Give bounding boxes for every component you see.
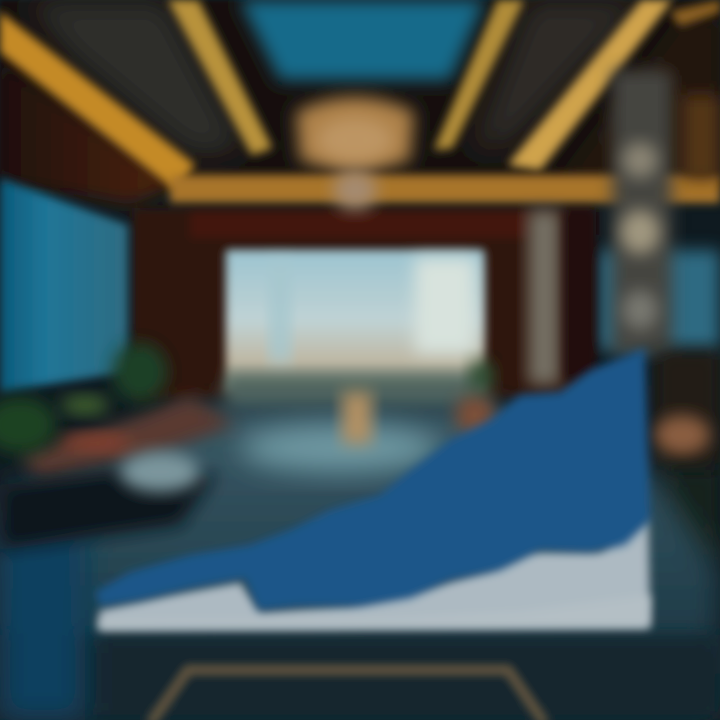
top right dark: [560, 20, 720, 180]
right windows and column: [528, 70, 720, 560]
gold beam: far left: [0, 12, 195, 190]
horizontal gold band: [170, 175, 720, 203]
ceiling panel left: [25, 0, 245, 155]
blue area series: [95, 348, 650, 610]
area chart: [95, 348, 650, 630]
chart light base: [98, 518, 650, 630]
ceiling wood left: [0, 60, 175, 205]
gold beam: inner right: [434, 0, 524, 150]
sofa and table: [0, 392, 495, 550]
chart highlight: [100, 595, 650, 628]
wood wall: [132, 208, 592, 398]
skylight: [240, 0, 485, 80]
gold beam: far right: [508, 0, 672, 170]
left window: [0, 178, 128, 392]
ceiling panel right: [470, 0, 645, 150]
gold beam: inner left: [168, 0, 272, 155]
central window: [225, 250, 485, 409]
ceiling: [0, 0, 720, 205]
rug frame: [150, 670, 545, 720]
gold accent top right: [670, 0, 720, 26]
plants: [0, 342, 495, 453]
floor and lower room: [0, 405, 720, 720]
chandelier: [296, 97, 414, 210]
